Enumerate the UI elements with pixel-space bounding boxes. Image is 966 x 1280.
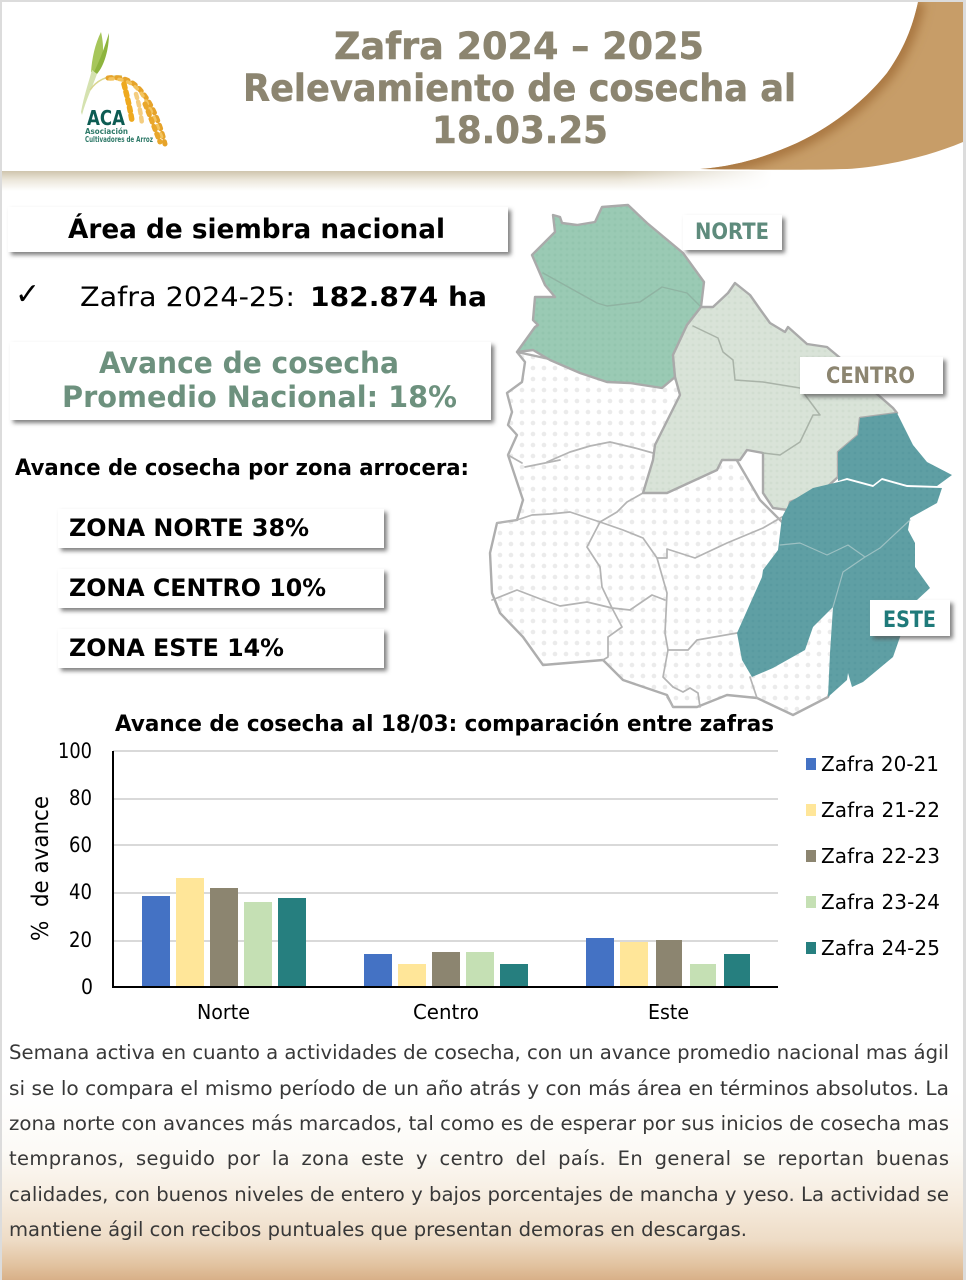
bars: Centro: [364, 952, 528, 987]
footer gradient background: [0, 1090, 966, 1280]
text: zafra area: [15, 277, 487, 313]
map: southern white departments: [490, 352, 860, 715]
title: Relevamiento de cosecha al: [243, 67, 796, 110]
panel: avance promedio nacional: Avance de cosecha: [99, 346, 399, 380]
panel: zona este: [58, 629, 384, 668]
title: 18.03.25: [432, 109, 608, 152]
commentary paragraph: Semana activa en cuanto a actividades de cosecha, con un avance promedio nacional mas ágil: [9, 1041, 949, 1064]
chart legend: [806, 752, 940, 960]
commentary paragraph: calidades, con buenos niveles de entero y bajos porcentajes de mancha y yeso. La actividad se: [9, 1183, 949, 1206]
swoosh: [690, 0, 966, 175]
y axis ticks: 100: [58, 739, 92, 763]
y axis ticks: 20: [69, 928, 92, 952]
y axis title: % de avance: [28, 796, 54, 941]
commentary paragraph: tempranos, seguido por la zona este y centro del país. En general se reportan buenas: [9, 1147, 949, 1170]
panel: zona centro: ZONA CENTRO 10%: [69, 574, 326, 602]
panel: zona centro: [58, 569, 384, 608]
text: zafra area: ✓: [15, 277, 40, 312]
panel: zona norte: [58, 509, 384, 548]
label: CENTRO: [800, 357, 943, 394]
heading: avance por zona: Avance de cosecha por zona arrocera:: [15, 456, 469, 481]
logo: leaves and stem: [81, 32, 122, 115]
title: [243, 25, 796, 152]
panel: área de siembra heading: Área de siembra nacional: [68, 213, 445, 245]
bars: Norte: [142, 878, 306, 987]
label: CENTRO: CENTRO: [826, 364, 915, 389]
y axis ticks: 60: [69, 833, 92, 857]
y axis ticks: 0: [81, 975, 93, 999]
panel: zona este: ZONA ESTE 14%: [69, 634, 284, 662]
y axis ticks: 80: [69, 786, 92, 810]
map: zona este: [737, 413, 952, 697]
map of Uruguay: [490, 205, 952, 715]
label: ESTE: [870, 600, 950, 636]
logo: ACA: [81, 32, 165, 144]
commentary paragraph: si se lo compara el mismo período de un año atrás y con más área en términos absolutos. La: [9, 1077, 949, 1100]
chart legend: Zafra 22-23: [821, 844, 940, 868]
commentary paragraph: zona norte con avances más marcados, tal como es de esperar por sus inicios de cosecha mas: [9, 1112, 949, 1135]
map: zona centro: [643, 283, 897, 510]
panel: zona norte: ZONA NORTE 38%: [69, 514, 309, 542]
panel: avance promedio nacional: Promedio Nacional: 18%: [62, 380, 457, 414]
logo: rice panicle: [108, 78, 165, 144]
commentary paragraph: mantiene ágil con recibos puntuales que presentan demoras en descargas.: [9, 1218, 747, 1241]
label: NORTE: NORTE: [695, 220, 769, 245]
panel: área de siembra heading: [8, 207, 508, 252]
logo: ACA: Asociación: [85, 126, 128, 136]
y axis ticks: 40: [69, 880, 92, 904]
chart legend: Zafra 20-21: [821, 752, 939, 776]
chart legend: Zafra 21-22: [821, 798, 940, 822]
logo: ACA: Cultivadores de Arroz: [85, 135, 153, 144]
x axis categories: Este: [648, 1000, 689, 1024]
panel: avance promedio nacional: [10, 342, 491, 420]
label: ESTE: ESTE: [883, 608, 936, 633]
chart legend: Zafra 24-25: [821, 936, 940, 960]
chart legend: Zafra 23-24: [821, 890, 940, 914]
header band: [2, 0, 966, 191]
map: internal department lines: [492, 442, 782, 707]
bar chart: [28, 739, 778, 1024]
y axis ticks: [58, 739, 93, 999]
x axis categories: Norte: [197, 1000, 250, 1024]
text: zafra area: Zafra 2024-25:: [80, 282, 295, 313]
logo: ACA: ACA: [87, 106, 125, 130]
map: zona norte: [517, 205, 704, 388]
label: NORTE: [683, 215, 782, 250]
text: zafra area: 182.874 ha: [310, 282, 487, 313]
x axis categories: Centro: [413, 1000, 479, 1024]
bars: Este: [586, 938, 750, 987]
title: Zafra 2024 – 2025: [334, 25, 704, 68]
commentary paragraph: [9, 1041, 949, 1241]
x axis categories: [197, 1000, 689, 1024]
chart title: Avance de cosecha al 18/03: comparación entre zafras: [115, 712, 774, 737]
